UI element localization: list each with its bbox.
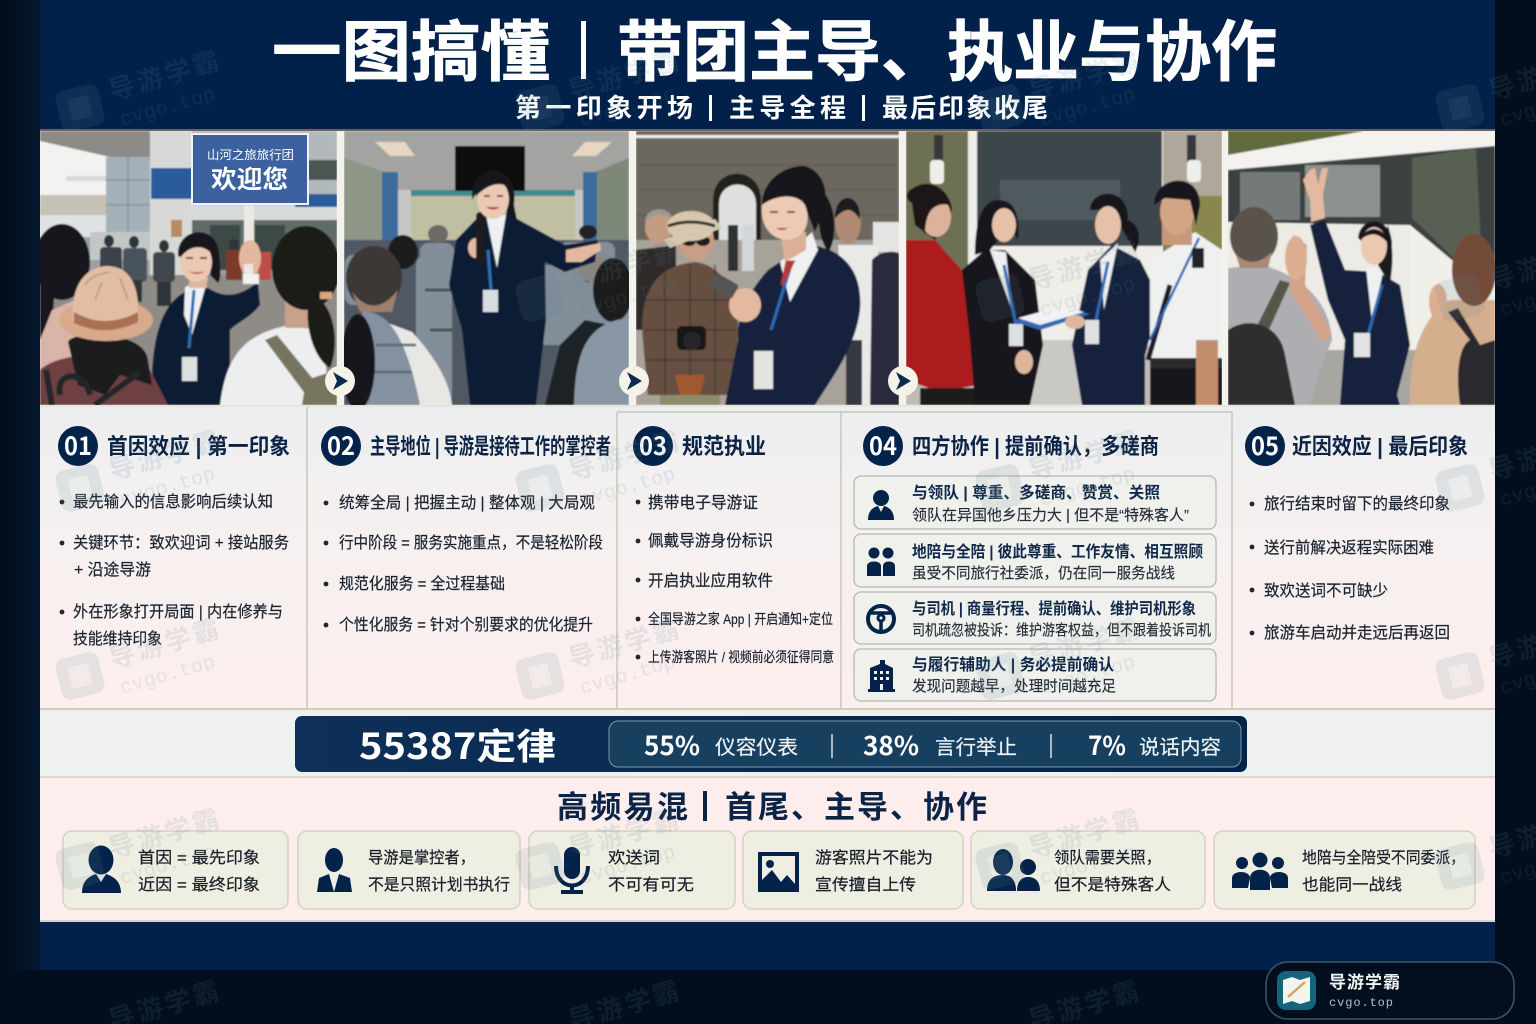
watermark layer: cvgo.top: [118, 842, 218, 891]
card: local and national guides same front: 地陪与全陪受不同委派，: [1302, 849, 1465, 867]
watermark layer: cvgo.top: [1038, 842, 1138, 891]
card: local and national guides: 地陪与全陪 | 彼此尊重、工作友情、相互照顾: [912, 542, 1203, 561]
bullets 01: [60, 493, 289, 648]
bullets 01: 最先输入的信息影响后续认知: [73, 493, 273, 511]
heading 02: 主导地位 | 导游是接待工作的掌控者: [370, 434, 611, 459]
watermark layer: 导游学霸: [565, 235, 685, 296]
icon: steering wheel: [868, 606, 894, 632]
guide: [152, 282, 260, 405]
heading: easily confused: [557, 790, 987, 825]
logo badge: [1266, 962, 1514, 1019]
watermark layer: 导游学霸: [105, 803, 225, 864]
stats panel: 说话内容: [1139, 736, 1221, 759]
left tourists: [34, 224, 90, 300]
card: performance assistants: 发现问题越早，处理时间越充足: [912, 678, 1116, 695]
right bystanders: [838, 245, 880, 405]
watermark layer: 导游学霸: [1025, 425, 1145, 486]
card: local and national guides same front: [1214, 831, 1475, 909]
card: guide controls: [298, 831, 520, 909]
badge 04: [863, 426, 903, 466]
icon: man in suit: [317, 848, 352, 892]
heading: easily confused: 首尾、主导、协作: [725, 790, 987, 825]
guide: [725, 243, 860, 405]
red jacket woman: [906, 240, 978, 392]
icon: map logo: [1277, 971, 1316, 1010]
heading 04: 四方协作 | 提前确认，多磋商: [912, 434, 1159, 459]
left passenger: [385, 322, 452, 405]
watermark layer: 导游学霸: [1025, 613, 1145, 674]
bullets 01: 关键环节：致欢迎词 + 接站服务: [73, 534, 289, 552]
title: [272, 15, 1277, 89]
55387 band background: [40, 710, 1495, 777]
watermark layer: 导游学霸: [1025, 235, 1145, 296]
watermark layer: 导游学霸: [1025, 803, 1145, 864]
watermark layer: cvgo.top: [118, 652, 218, 701]
arrow: photo 3 to 4: [888, 366, 918, 396]
bullets 03: 携带电子导游证: [648, 494, 758, 512]
man with backpack: [1228, 265, 1332, 405]
photo 4: guide, local guide, tour leader and driver: [906, 131, 1222, 405]
watermark layer: cvgo.top: [578, 652, 678, 701]
badge 05: [1245, 426, 1285, 466]
stats panel: 7%: [1088, 726, 1126, 763]
bullets 02: 个性化服务 = 针对个别要求的优化提升: [339, 616, 593, 634]
photo 2: guide speaking on bus: [341, 131, 633, 410]
watermark layer: cvgo.top: [118, 464, 218, 513]
bullets 03: [636, 494, 834, 665]
watermark layer: 导游学霸: [565, 803, 685, 864]
tourist woman: [642, 262, 738, 395]
photo 1: guide greets tourists with sign: [34, 131, 340, 405]
card: tour leader: 领队在异国他乡压力大 | 但不是“特殊客人”: [912, 507, 1189, 524]
watermark layer: 导游学霸: [105, 613, 225, 674]
card: tourist photos: 游客照片不能为: [815, 849, 933, 867]
card: local and national guides same front: 也能同一战线: [1302, 876, 1402, 894]
card: local and national guides: 虽受不同旅行社委派，仍在同一服务战线: [912, 565, 1175, 582]
badge 02: 02: [327, 427, 355, 463]
card: tour leader: [854, 476, 1216, 529]
rule name: 55387定律: [359, 718, 556, 770]
card: driver: [854, 592, 1216, 644]
driver: [1150, 232, 1222, 360]
confusion section background: [40, 778, 1495, 921]
logo badge: cvgo.top: [1329, 996, 1393, 1010]
photo 1: guide greets tourists with sign: 山河之旅旅行团: [207, 148, 294, 162]
subtitle: 第一印象开场: [515, 93, 693, 123]
photo 5: guide waves farewell at coach: [1228, 131, 1496, 405]
watermark layer: 导游学霸: [565, 613, 685, 674]
card: welcome speech: 欢送词: [608, 849, 660, 867]
stats panel: 55%: [644, 726, 700, 763]
watermark layer: 导游学霸: [565, 45, 685, 106]
stats panel: 言行举止: [935, 736, 1017, 759]
card: first and last impression: 近因 = 最终印象: [138, 876, 260, 894]
card: first and last impression: [63, 831, 288, 909]
bullets 02: 行中阶段 = 服务实施重点，不是轻松阶段: [339, 534, 603, 552]
subtitle: [515, 93, 1048, 123]
watermark layer: cvgo.top: [118, 84, 218, 133]
card: performance assistants: [854, 649, 1216, 701]
badge 01: [58, 426, 98, 466]
bullets 03: 上传游客照片 / 视频前必须征得同意: [648, 649, 834, 665]
card: local and national guides: [854, 534, 1216, 587]
title: 带团主导、执业与协作: [617, 15, 1277, 89]
stats panel: [609, 721, 1241, 767]
icon: leader: [868, 490, 894, 520]
folder: [1012, 312, 1090, 331]
badge 03: [633, 426, 673, 466]
panel 01: first impression: [58, 426, 290, 648]
card: welcome speech: [529, 831, 735, 909]
bullets 02: [324, 494, 603, 634]
bullets 02: 规范化服务 = 全过程基础: [339, 575, 505, 593]
sign text panel: [192, 134, 308, 204]
stats panel: 38%: [863, 726, 919, 763]
card: tour leader: 与领队 | 尊重、多磋商、赞赏、关照: [912, 483, 1160, 502]
heading 05: 近因效应 | 最后印象: [1292, 434, 1468, 459]
bullets 05: 旅行结束时留下的最终印象: [1264, 495, 1450, 513]
guide 3: [1072, 245, 1160, 405]
card: driver: 与司机 | 商量行程、提前确认、维护司机形象: [912, 599, 1196, 618]
arrow: photo 1 to 2: [325, 366, 355, 396]
right tourist: [220, 326, 330, 405]
photo 3: guide with tourists at historic gate: [636, 131, 899, 405]
icon: microphone: [556, 847, 588, 892]
card: guide controls: 导游是掌控者，: [368, 849, 475, 867]
right tourist: [1410, 300, 1495, 405]
icon: two people: [987, 849, 1040, 891]
arrow: photo 2 to 3: [619, 366, 649, 396]
subtitle: 最后印象收尾: [882, 93, 1048, 123]
icon: group: [1232, 852, 1288, 890]
watermark layer: cvgo.top: [1038, 274, 1138, 323]
bullets 03: 全国导游之家 App | 开启通知+定位: [648, 611, 833, 627]
bullets 03: 佩戴导游身份标识: [648, 532, 773, 550]
title: 一图搞懂: [272, 15, 550, 89]
crowd: [100, 235, 271, 306]
bullets 05: 旅游车启动并走远后再返回: [1264, 624, 1450, 642]
watermark layer: cvgo.top: [1038, 652, 1138, 701]
five-column knowledge area: [40, 407, 1495, 709]
guide 2: [962, 250, 1043, 405]
card: tourist photos: 宣传擅自上传: [815, 875, 916, 894]
badge 04: 04: [869, 427, 897, 463]
bullets 05: 送行前解决返程实际困难: [1264, 539, 1434, 557]
guide: [1310, 220, 1410, 405]
heading: easily confused: 高频易混: [557, 790, 688, 825]
older man: [645, 210, 673, 244]
watermark layer: 导游学霸: [1025, 45, 1145, 106]
card: guide controls: 不是只照计划书执行: [368, 876, 510, 894]
icon: picture: [758, 852, 799, 892]
bullets 05: 致欢送词不可缺少: [1264, 582, 1388, 600]
photo 1: guide greets tourists with sign: 欢迎您: [211, 166, 288, 194]
bullets 03: 开启执业应用软件: [648, 571, 773, 590]
card: performance assistants: 与履行辅助人 | 务必提前确认: [912, 655, 1114, 674]
watermark layer: cvgo.top: [578, 464, 678, 513]
guide: [449, 215, 598, 405]
icon: two guides: [867, 548, 895, 576]
heading 01: 首因效应 | 第一印象: [107, 434, 290, 459]
panel 02: leading role: [321, 426, 611, 634]
panel 04: four-party cooperation: [854, 426, 1216, 701]
watermark layer: cvgo.top: [578, 842, 678, 891]
pole: [242, 205, 256, 244]
card: welcome speech: 不可有可无: [608, 876, 694, 894]
bullets 02: 统筹全局 | 把握主动 | 整体观 | 大局观: [339, 494, 595, 512]
badge 03: 03: [639, 427, 667, 463]
bullets 01: 外在形象打开局面 | 内在修养与: [73, 603, 283, 621]
badge 05: 05: [1251, 427, 1279, 463]
card: tour leader care: 但不是特殊客人: [1054, 876, 1171, 894]
badge 02: [321, 426, 361, 466]
stats panel: 仪容仪表: [715, 736, 798, 759]
55387 rule bar: [295, 716, 1247, 772]
right passenger: [593, 258, 633, 322]
badge 01: 01: [64, 427, 92, 463]
watermark layer: cvgo.top: [1038, 84, 1138, 133]
card: driver: 司机疏忽被投诉：维护游客权益，但不跟着投诉司机: [912, 622, 1211, 639]
subtitle: 主导全程: [729, 93, 846, 123]
icon: person: [82, 846, 121, 893]
panel 03: standard practice: [633, 426, 834, 665]
watermark layer: 导游学霸: [105, 45, 225, 106]
watermark layer: 导游学霸: [565, 425, 685, 486]
card: tour leader care: 领队需要关照，: [1054, 849, 1161, 867]
bullets 01: + 沿途导游: [74, 561, 151, 579]
logo badge: 导游学霸: [1329, 972, 1400, 992]
heading 03: 规范执业: [682, 434, 766, 459]
icon: building: [868, 660, 895, 692]
card: first and last impression: 首因 = 最先印象: [138, 849, 260, 867]
watermark layer: 导游学霸: [105, 425, 225, 486]
bullets 05: [1250, 495, 1450, 642]
card: tourist photos: [743, 831, 963, 909]
card: tour leader care: [971, 831, 1205, 909]
watermark layer: cvgo.top: [578, 84, 678, 133]
watermark layer: cvgo.top: [1038, 464, 1138, 513]
watermark layer: cvgo.top: [578, 274, 678, 323]
bullets 01: 技能维持印象: [73, 630, 162, 648]
panel 05: last impression: [1245, 426, 1468, 642]
